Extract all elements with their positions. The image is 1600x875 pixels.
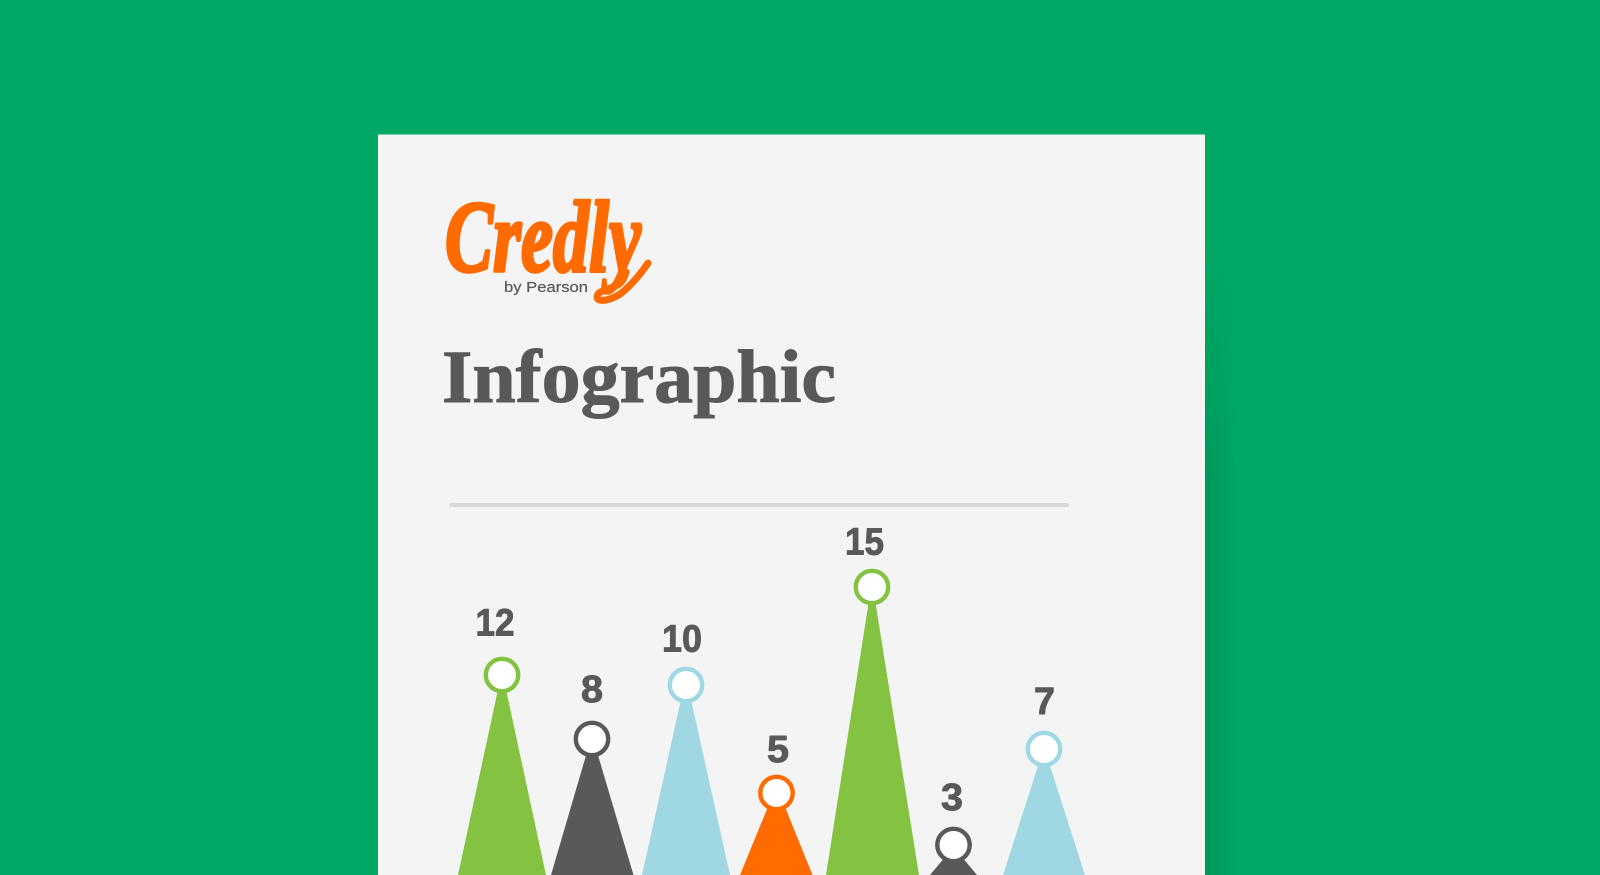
logo tail flourish [597, 263, 648, 300]
chart: peak values [458, 522, 1085, 875]
bar: 3: 3 [941, 777, 963, 819]
bar: 5 [740, 729, 812, 875]
title: Infographic [442, 336, 836, 419]
panel: infographic card [378, 134, 1205, 875]
bar: 5: 5 [767, 729, 789, 771]
bar: 8: 8 [581, 669, 603, 711]
logo: Credly by Pearson: by Pearson [504, 279, 588, 296]
bar: 10: 10 [662, 618, 702, 660]
bar: 7: 7 [1034, 681, 1055, 723]
bar: 12 [458, 602, 546, 875]
bar: 10 [642, 618, 730, 875]
bar: 15: 15 [845, 522, 884, 564]
logo: Credly by Pearson: Credly [445, 181, 642, 294]
bar: 12: 12 [476, 602, 514, 644]
bar: 3 [930, 777, 977, 875]
bar: 15 [826, 522, 919, 875]
panel shadow [1205, 353, 1224, 875]
bar: 7 [1003, 681, 1085, 875]
bar: 8 [551, 669, 634, 875]
